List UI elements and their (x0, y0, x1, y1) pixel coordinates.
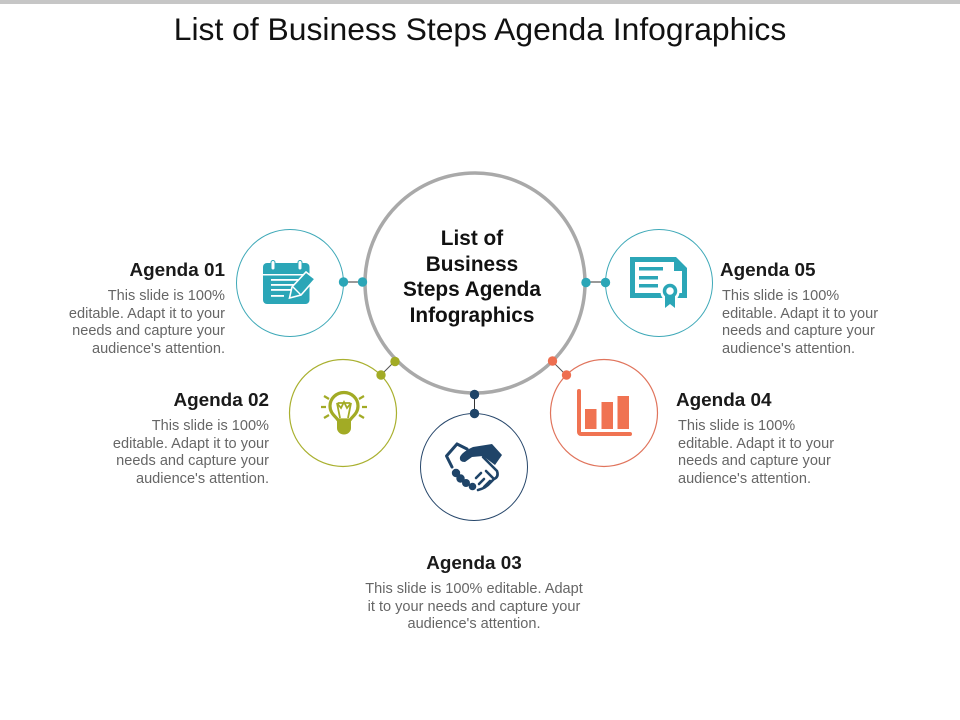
agenda 04 text: audience's attention. (678, 471, 811, 487)
agenda 03 node (420, 390, 528, 520)
agenda 01 text: audience's attention. (92, 341, 225, 357)
agenda 01 text: This slide is 100% (108, 288, 225, 304)
agenda 05 text: This slide is 100% (722, 288, 839, 304)
central circle label: Steps Agenda (403, 278, 541, 301)
central circle label: Business (426, 252, 518, 276)
agenda 02 text: needs and capture your (116, 453, 269, 469)
agenda 02 node (290, 357, 400, 466)
icon: certificate (630, 257, 687, 308)
agenda 05 node (581, 230, 712, 336)
central circle (365, 173, 585, 393)
agenda 01 text: Agenda 01 (129, 260, 225, 281)
icon: light bulb (321, 392, 367, 434)
agenda 02 text: editable. Adapt it to your (113, 436, 269, 452)
agenda 01 text: needs and capture your (72, 323, 225, 339)
agenda 01 node (236, 230, 367, 336)
agenda 04 text (676, 390, 834, 487)
agenda 03 text: audience's attention. (408, 616, 540, 632)
agenda 03 text: This slide is 100% editable. Adapt (365, 581, 583, 597)
agenda 04 text: editable. Adapt it to your (678, 436, 834, 452)
agenda 04 text: needs and capture your (678, 453, 831, 469)
agenda 02 text (113, 390, 269, 487)
agenda 04 node (548, 356, 658, 466)
central circle label (403, 227, 542, 326)
central circle label: List of (441, 227, 503, 250)
agenda 05 text (720, 260, 878, 357)
agenda 01 text: editable. Adapt it to your (69, 306, 225, 322)
agenda 02 text: This slide is 100% (152, 418, 269, 434)
agenda 02 text: audience's attention. (136, 471, 269, 487)
agenda 05 text: editable. Adapt it to your (722, 306, 878, 322)
top bar (0, 0, 960, 4)
title: List of Business Steps Agenda Infographics (174, 11, 786, 47)
central circle label: Infographics (410, 304, 534, 326)
agenda 03 text: Agenda 03 (426, 553, 522, 574)
agenda 04 text: This slide is 100% (678, 418, 795, 434)
agenda 05 text: needs and capture your (722, 323, 875, 339)
agenda 03 text: it to your needs and capture your (368, 599, 580, 615)
icon: bar chart (577, 389, 632, 436)
icon: calendar with pencil (263, 260, 315, 304)
agenda 04 text: Agenda 04 (676, 390, 772, 411)
agenda 01 text (69, 260, 225, 357)
agenda 03 text (365, 553, 583, 632)
agenda 02 text: Agenda 02 (173, 390, 269, 411)
agenda 05 text: Agenda 05 (720, 260, 816, 281)
agenda 05 text: audience's attention. (722, 341, 855, 357)
icon: handshake (446, 444, 502, 490)
